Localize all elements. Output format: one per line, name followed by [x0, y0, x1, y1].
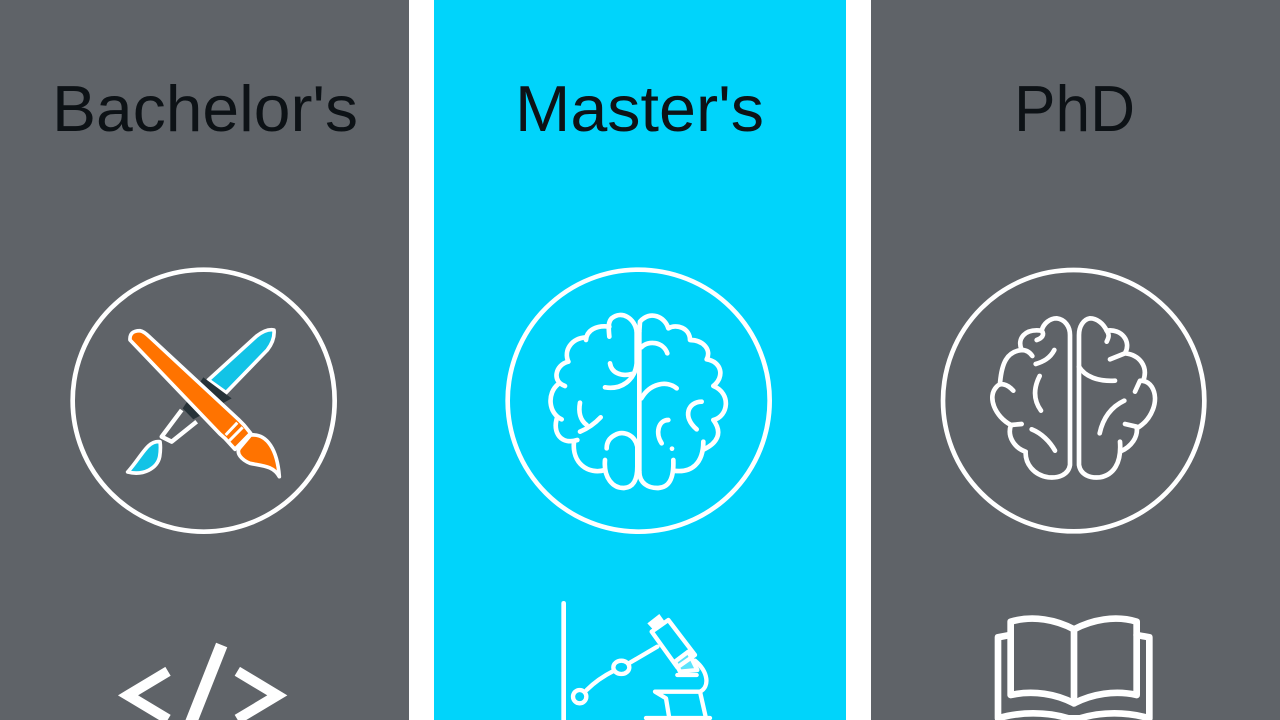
- panel: PhD: [871, 0, 1280, 720]
- icon: brain in circle: [508, 270, 770, 532]
- heading: PhD: PhD: [1014, 72, 1135, 145]
- panel: Master's: [434, 0, 846, 720]
- icon: brain outline in circle: [943, 270, 1204, 531]
- heading: Master's: Master's: [515, 72, 764, 145]
- heading: Bachelor's: Bachelor's: [52, 72, 358, 145]
- icon: microscope with chart: [564, 603, 710, 720]
- icon: crossed paint brushes in circle: [73, 270, 335, 532]
- icon: code brackets: [128, 645, 277, 720]
- panel: Bachelor's: [0, 0, 409, 720]
- icon: open book: [998, 619, 1149, 718]
